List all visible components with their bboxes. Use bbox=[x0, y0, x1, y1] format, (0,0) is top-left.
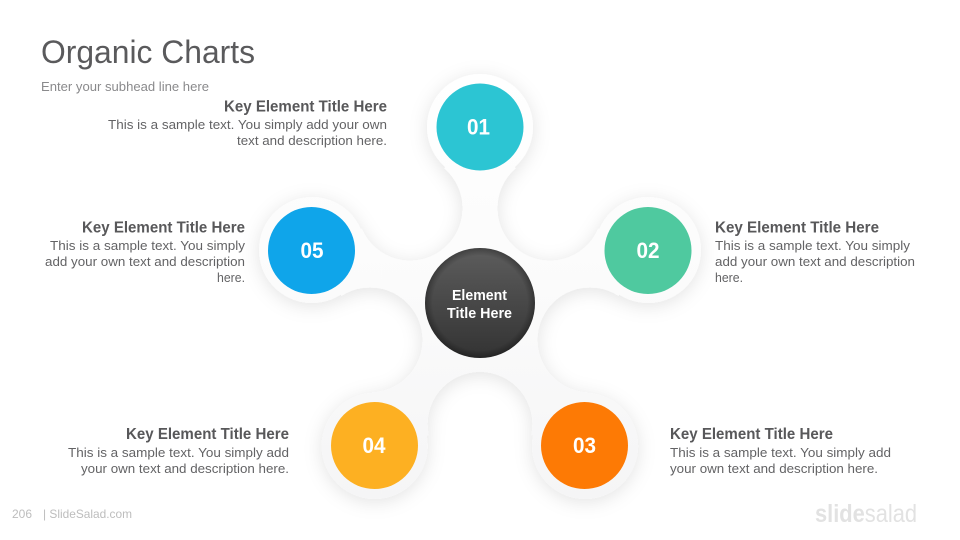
node 04: 04 bbox=[362, 433, 386, 458]
text block 02: add your own text and description bbox=[715, 254, 915, 269]
text block 02: This is a sample text. You simply bbox=[715, 238, 911, 253]
text block 05: here. bbox=[217, 270, 245, 285]
text block 04: This is a sample text. You simply add bbox=[68, 445, 289, 460]
center node: Element bbox=[452, 288, 507, 304]
text block 02: Key Element Title Here bbox=[715, 220, 879, 236]
node 03: 03 bbox=[573, 433, 596, 458]
center node: Title Here bbox=[447, 306, 512, 322]
text block 04: your own text and description here. bbox=[81, 461, 289, 476]
text block 03: Key Element Title Here bbox=[670, 426, 833, 443]
text block 03 bbox=[670, 426, 891, 476]
text block 01 bbox=[108, 98, 387, 148]
text block 01: text and description here. bbox=[237, 133, 387, 148]
node 05: 05 bbox=[300, 238, 324, 263]
node 02 bbox=[604, 207, 692, 294]
text block 01: Key Element Title Here bbox=[224, 98, 387, 116]
footer page number: 206 bbox=[12, 507, 32, 521]
node 01: 01 bbox=[467, 114, 490, 140]
text block 02: here. bbox=[715, 270, 743, 285]
text block 05: add your own text and description bbox=[45, 254, 245, 269]
node 01 bbox=[436, 84, 524, 170]
text block 03: your own text and description here. bbox=[670, 461, 878, 476]
text block 01: This is a sample text. You simply add your own bbox=[108, 117, 387, 132]
text block 04 bbox=[68, 426, 289, 476]
logo: slidesalad bbox=[815, 500, 917, 528]
text block 05 bbox=[45, 220, 246, 285]
text block 05: Key Element Title Here bbox=[82, 220, 245, 236]
node 02: 02 bbox=[636, 238, 660, 263]
text block 02 bbox=[715, 220, 915, 285]
text block 04: Key Element Title Here bbox=[126, 426, 289, 443]
node 03 bbox=[541, 402, 628, 489]
subhead: Enter your subhead line here bbox=[41, 80, 209, 94]
footer source: | SlideSalad.com bbox=[43, 507, 132, 521]
text block 05: This is a sample text. You simply bbox=[50, 238, 246, 253]
node 04 bbox=[331, 402, 418, 489]
node 05 bbox=[268, 207, 355, 294]
text block 03: This is a sample text. You simply add bbox=[670, 445, 891, 460]
title: Organic Charts bbox=[41, 34, 255, 70]
center node bbox=[425, 248, 535, 358]
organic shape: five-armed background bbox=[259, 74, 701, 499]
